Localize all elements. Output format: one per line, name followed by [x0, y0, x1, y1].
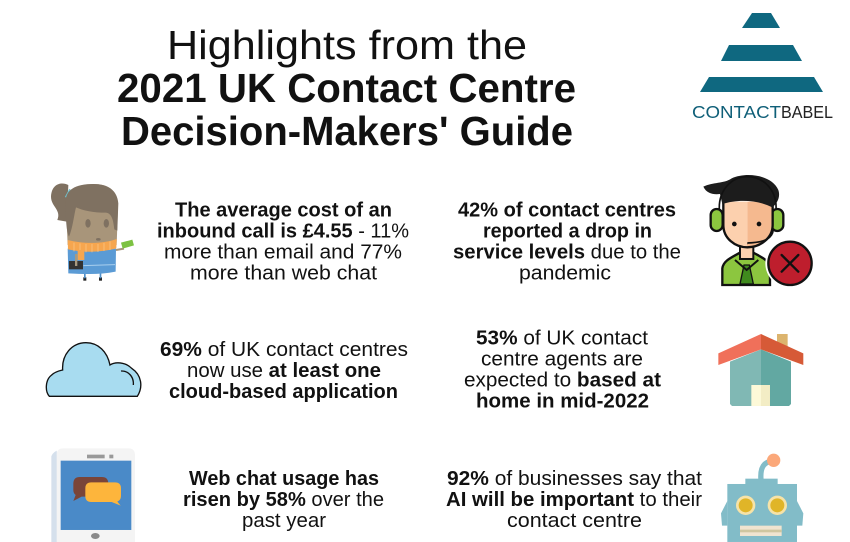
text: AI importance: AI will be important to their	[446, 489, 702, 511]
text: homeworking: expected to based at	[464, 370, 661, 392]
icon: woman holding money	[51, 184, 134, 281]
text: web chat usage: past year	[242, 510, 326, 532]
text: service levels: service levels due to the	[453, 242, 681, 264]
text: service levels: pandemic	[519, 262, 611, 284]
text: inbound call cost: more than web chat	[190, 262, 377, 284]
text: cloud adoption	[160, 339, 408, 403]
text: homeworking	[464, 328, 661, 412]
title: Decision-Makers' Guide	[121, 108, 573, 154]
text: homeworking: home in mid-2022	[476, 390, 649, 412]
text: homeworking: centre agents are	[481, 348, 643, 370]
icon: robot	[721, 454, 803, 542]
text: cloud adoption: now use at least one	[187, 360, 381, 382]
text: cloud adoption: 69% of UK contact centres	[160, 339, 408, 361]
text: cloud adoption: cloud-based application	[169, 381, 398, 403]
logo: ContactBabel	[692, 13, 833, 122]
text: inbound call cost: inbound call is £4.55 - 11%	[157, 220, 409, 242]
logo: ContactBabel: BABEL	[781, 102, 833, 122]
text: homeworking: 53% of UK contact	[476, 328, 648, 350]
text: inbound call cost: The average cost of an	[175, 200, 392, 222]
icon: house	[718, 334, 803, 406]
text: inbound call cost	[157, 200, 409, 284]
text: AI importance	[446, 468, 702, 532]
text: inbound call cost: more than email and 77%	[164, 242, 402, 264]
icon: cloud	[46, 343, 141, 396]
text: service levels	[453, 200, 681, 284]
icon: phone with chat bubbles	[51, 448, 135, 542]
title: Highlights from the	[167, 22, 527, 68]
text: service levels: reported a drop in	[483, 220, 652, 242]
icon: call agent with red cross	[703, 175, 815, 288]
title	[117, 22, 576, 154]
logo: ContactBabel: CONTACT	[692, 102, 781, 122]
text: AI importance: contact centre	[507, 510, 642, 532]
text: AI importance: 92% of businesses say that	[447, 468, 702, 490]
title: 2021 UK Contact Centre	[117, 65, 576, 111]
text: service levels: 42% of contact centres	[458, 200, 676, 222]
text: web chat usage	[183, 468, 384, 532]
text: web chat usage: Web chat usage has	[189, 468, 379, 490]
text: web chat usage: risen by 58% over the	[183, 489, 384, 511]
